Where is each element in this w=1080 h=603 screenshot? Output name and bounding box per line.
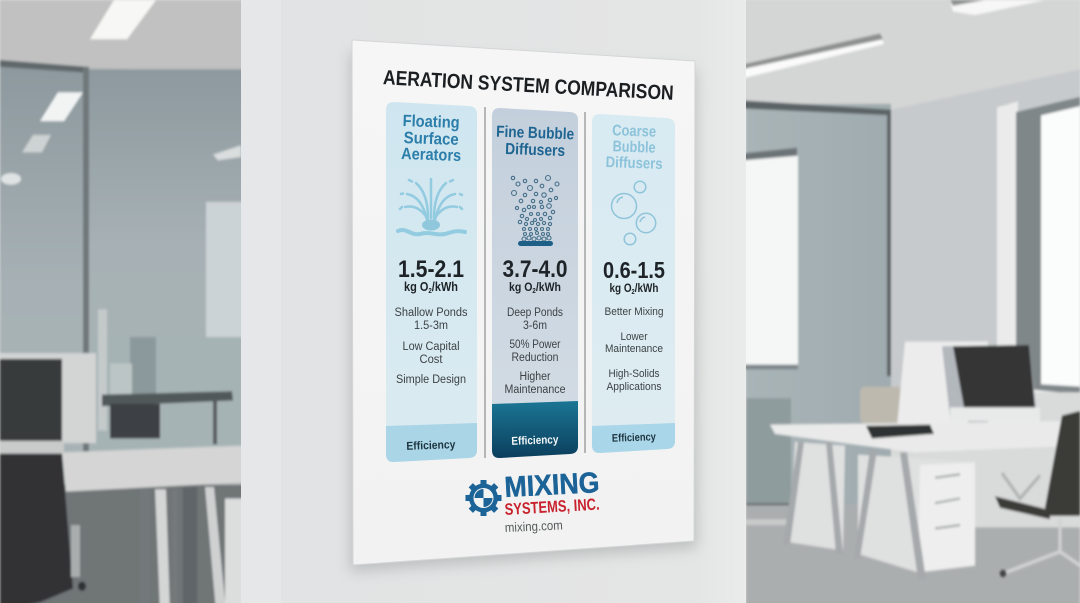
url: mixing.com	[504, 517, 563, 535]
text: floating surface features: 1.5-3m	[414, 320, 448, 332]
metric: floating surface: kg O	[404, 280, 432, 294]
text: fine bubble features: Deep Ponds	[507, 307, 563, 319]
heading: fine bubble diffusers	[496, 124, 575, 160]
heading: coarse bubble diffusers: Bubble	[612, 138, 656, 157]
text: coarse bubble features	[604, 306, 664, 393]
metric: coarse bubble: /kWh	[635, 281, 658, 295]
metric: fine bubble: 3.7-4.0	[502, 256, 568, 283]
label: efficiency: Efficiency	[612, 431, 657, 445]
text: fine bubble features	[504, 307, 566, 396]
metric: coarse bubble	[603, 257, 665, 296]
text: fine bubble features: Higher	[520, 371, 551, 383]
heading: floating surface aerators: Aerators	[401, 145, 461, 165]
label: efficiency: Efficiency	[511, 434, 559, 448]
title: AERATION SYSTEM COMPARISON	[382, 66, 674, 105]
text: floating surface features: Simple Design	[396, 374, 466, 386]
poster shadow	[350, 52, 697, 572]
text: coarse bubble features: Better Mixing	[604, 306, 664, 318]
icon: diffuser base	[518, 241, 553, 246]
background: left office scene	[0, 0, 245, 603]
divider: left	[484, 107, 486, 458]
icon: fountain aerator	[398, 179, 465, 234]
metric: floating surface: 2	[428, 288, 432, 295]
wordmark: mixing: MIXING	[504, 467, 600, 504]
icon: coarse bubbles	[612, 181, 656, 245]
text: coarse bubble features: Applications	[606, 381, 662, 393]
panel: floating surface aerators	[386, 102, 477, 462]
icon: gear	[466, 480, 502, 516]
text: coarse bubble features: Lower	[620, 331, 648, 343]
metric: fine bubble: 2	[532, 288, 536, 295]
text: fine bubble features: Maintenance	[504, 384, 566, 396]
metric: fine bubble	[502, 256, 568, 295]
text: fine bubble features: 3-6m	[523, 320, 547, 332]
heading: floating surface aerators	[401, 112, 461, 165]
icon: fountain base	[422, 220, 440, 230]
heading: coarse bubble diffusers: Coarse	[612, 122, 657, 141]
metric: floating surface: /kWh	[432, 280, 458, 294]
poster board	[352, 40, 695, 565]
background: wall column	[241, 0, 746, 603]
heading: coarse bubble diffusers: Diffusers	[605, 154, 663, 173]
metric: floating surface: 1.5-2.1	[398, 256, 464, 283]
logo: mixing systems	[466, 467, 600, 535]
heading: floating surface aerators: Surface	[403, 129, 459, 149]
metric: fine bubble: /kWh	[536, 280, 561, 294]
label: efficiency: Efficiency	[406, 439, 456, 453]
text: floating surface features: Low Capital	[402, 341, 460, 353]
icon: fine bubbles	[511, 176, 559, 241]
heading: fine bubble diffusers: Diffusers	[505, 141, 566, 160]
text: floating surface features: Shallow Ponds	[394, 307, 468, 319]
background: right office scene	[742, 0, 1080, 603]
metric: floating surface	[398, 256, 464, 295]
wordmark: systems, inc.: SYSTEMS, INC.	[504, 496, 600, 519]
heading: floating surface aerators: Floating	[402, 112, 460, 132]
text: fine bubble features: 50% Power	[510, 339, 561, 351]
metric: coarse bubble: kg O	[610, 281, 636, 295]
panel: coarse bubble diffusers	[592, 114, 675, 453]
text: floating surface features	[394, 307, 468, 386]
text: coarse bubble features: High-Solids	[608, 368, 660, 380]
heading: fine bubble diffusers: Fine Bubble	[496, 124, 575, 143]
heading: coarse bubble diffusers	[605, 122, 663, 173]
panel: fine bubble diffusers	[492, 108, 578, 458]
text: floating surface features: Cost	[420, 354, 443, 366]
text: coarse bubble features: Maintenance	[605, 343, 663, 355]
metric: coarse bubble: 0.6-1.5	[603, 257, 665, 283]
metric: coarse bubble: 2	[632, 289, 635, 296]
text: fine bubble features: Reduction	[512, 352, 558, 364]
metric: fine bubble: kg O	[509, 280, 536, 294]
